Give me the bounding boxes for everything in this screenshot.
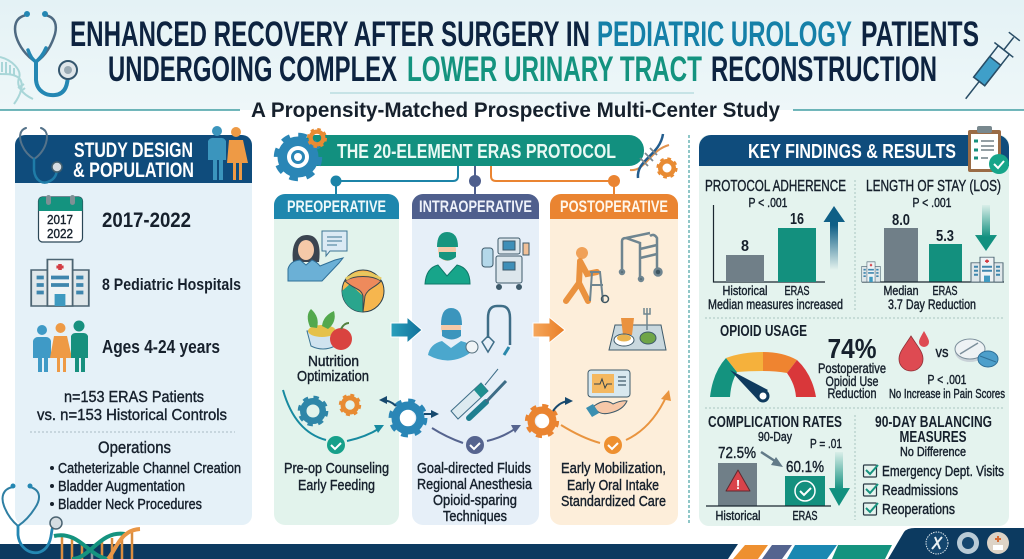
section: opioid usage: OPIOID USAGE: [720, 323, 807, 340]
chart: protocol adherence: 16: [790, 211, 804, 228]
panel title: & POPULATION: [73, 159, 194, 182]
icon: check badge: [795, 481, 815, 501]
icon: walker: [620, 233, 662, 281]
title: UNDERGOING COMPLEX: [108, 50, 397, 89]
hospital count: 8 Pediatric Hospitals: [102, 275, 241, 294]
icon: small hospital: [862, 262, 880, 282]
arrow: complication decrease: [829, 452, 850, 506]
chart: length of stay: P < .001: [912, 195, 952, 210]
process icons: [432, 425, 521, 454]
icon: bottom stethoscope: [3, 484, 62, 553]
chart: protocol adherence: 8: [741, 238, 749, 255]
column: postoperative: [550, 194, 678, 525]
icon: calendar: 2022: [47, 226, 73, 241]
section: opioid usage: Opioid Use: [826, 373, 879, 389]
arrow: intra to post: [533, 317, 565, 343]
column: preoperative: [274, 194, 399, 525]
opioid reduction: 74%: [828, 333, 877, 364]
elements: intraoperative: Opioid-sparing: [433, 493, 517, 509]
column: postoperative: POSTOPERATIVE: [560, 197, 668, 216]
process icons: [283, 390, 384, 454]
chart: complication rates: !: [736, 477, 740, 492]
chart: protocol adherence: ERAS: [784, 283, 810, 298]
icon: monitor and hand: [586, 370, 630, 417]
icon: pills: [955, 339, 998, 367]
arrow: historical to ERAS: [761, 452, 778, 463]
icon: anatomical diagram: [342, 270, 384, 312]
chart: length of stay: 5.3: [936, 228, 954, 245]
panel header: [15, 135, 252, 183]
icon: blood drops: [899, 331, 929, 371]
icon: calendar: 2017: [47, 212, 73, 227]
operations list: Operations: [98, 438, 171, 457]
logos: [926, 532, 1009, 554]
section: opioid usage: [710, 323, 1005, 401]
chart: length of stay: 8.0: [892, 212, 910, 229]
chart: complication rates: 72.5%: [718, 445, 756, 462]
chart: length of stay: Median: [884, 283, 918, 298]
date range: 2017-2022: [102, 209, 191, 232]
icon: two people: [208, 126, 248, 180]
icon: bottom DNA: [54, 529, 140, 559]
operations list: Bladder Augmentation: [58, 479, 185, 495]
header rules: [0, 93, 1024, 110]
chart: complication rates: Historical: [716, 509, 760, 523]
chart: complication rates: [706, 414, 850, 523]
chart: complication rates: 90-Day: [758, 429, 792, 444]
gauge: [710, 352, 816, 401]
icon: gear connector orange: [528, 397, 573, 436]
panel: ERAS protocol: [274, 130, 678, 525]
icon: checkboxes: [864, 465, 878, 515]
title: LOWER URINARY TRACT: [407, 50, 702, 89]
section: balancing measures: No Difference: [900, 445, 966, 459]
chart: protocol adherence: PROTOCOL ADHERENCE: [705, 178, 846, 195]
elements: postoperative: Standardized Care: [561, 494, 666, 510]
section: balancing measures: [864, 414, 1004, 518]
elements: preoperative: Early Feeding: [298, 478, 375, 494]
icon: syringe: [956, 29, 1024, 106]
title: ENHANCED RECOVERY AFTER SURGERY IN: [70, 15, 590, 54]
icon: anesthesia machine: [482, 238, 529, 290]
column: preoperative: PREOPERATIVE: [287, 197, 386, 216]
panel title: KEY FINDINGS & RESULTS: [748, 140, 956, 163]
chart: protocol adherence: P < .001: [748, 195, 788, 210]
icon: gear connector blue: [379, 396, 439, 434]
icon: calendar: [38, 195, 82, 242]
icon: hospital: [31, 260, 89, 306]
arrow: pre to intra: [391, 317, 422, 343]
elements: intraoperative: Goal-directed Fluids: [417, 461, 531, 477]
label: nutrition: [297, 354, 369, 385]
icon: header DNA: [0, 57, 33, 104]
header background: [0, 0, 1024, 110]
icon: warning: [726, 470, 750, 491]
icon: three patients: [33, 320, 88, 372]
section: opioid usage: vs: [936, 344, 948, 361]
arrow: decrease: [975, 205, 997, 251]
chart: protocol adherence: [705, 178, 846, 312]
chart: length of stay: [862, 178, 1004, 312]
chart: protocol adherence: Median measures increased: [708, 297, 843, 312]
protocol banner: THE 20-ELEMENT ERAS PROTOCOL: [337, 141, 616, 163]
sample size: vs. n=153 Historical Controls: [37, 407, 227, 424]
section: balancing measures: 90-DAY BALANCING: [875, 414, 992, 431]
operations list: Bladder Neck Procedures: [58, 497, 202, 513]
icon: gears: [278, 130, 326, 178]
chart: complication rates: 60.1%: [786, 459, 824, 476]
title: PATIENTS: [861, 15, 979, 54]
section: opioid usage: Reduction: [828, 385, 876, 401]
section: balancing measures: Reoperations: [882, 502, 955, 518]
panel: key findings: [699, 126, 1009, 526]
section: balancing measures: Readmissions: [882, 483, 958, 499]
icon: patient with walker: [566, 247, 608, 302]
label: nutrition: Optimization: [297, 369, 369, 385]
panel title: [73, 139, 194, 182]
icon: clipboard: [968, 126, 1009, 174]
sample size: [37, 389, 227, 424]
chart: complication rates: COMPLICATION RATES: [708, 414, 842, 431]
footer stripes: [733, 545, 892, 559]
operations list: Catheterizable Channel Creation: [58, 461, 241, 477]
process icons: [561, 390, 671, 454]
age range: Ages 4-24 years: [102, 337, 220, 357]
column: intraoperative: INTRAOPERATIVE: [419, 197, 532, 216]
chart: complication rates: ERAS: [792, 509, 818, 523]
column: intraoperative: [412, 194, 539, 525]
icon: stethoscope: [20, 128, 62, 183]
section: opioid usage: P < .001: [928, 372, 966, 387]
connectors: [330, 166, 620, 195]
panel title: STUDY DESIGN: [74, 139, 193, 162]
icon: counselor: [288, 231, 347, 281]
subtitle: A Propensity-Matched Prospective Multi-Center Study: [251, 99, 780, 122]
icon: anesthesiologist: [425, 232, 470, 284]
section: balancing measures: MEASURES: [900, 429, 966, 446]
operations list: [50, 438, 241, 513]
panel: study design and population: [15, 126, 252, 525]
label: nutrition: Nutrition: [308, 354, 359, 370]
sample size: n=153 ERAS Patients: [64, 389, 204, 406]
icon: nutrition: [307, 309, 352, 350]
elements: intraoperative: [417, 461, 533, 525]
chart: protocol adherence: Historical: [722, 283, 768, 298]
title: [70, 15, 979, 89]
chart: complication rates: P = .01: [810, 436, 842, 451]
icon: large hospital: [971, 257, 1003, 282]
panel header: [699, 135, 1009, 166]
elements: preoperative: Pre-op Counseling: [284, 461, 389, 477]
chart: length of stay: 3.7 Day Reduction: [888, 297, 976, 312]
elements: postoperative: Early Oral Intake: [567, 478, 659, 494]
footer band: [0, 528, 1024, 559]
elements: postoperative: [561, 461, 666, 510]
icon: provider with stethoscope: [428, 306, 510, 360]
chart: length of stay: ERAS: [932, 283, 958, 298]
arrow: increase: [824, 206, 845, 270]
section: opioid usage: Postoperative: [818, 360, 886, 376]
elements: intraoperative: Regional Anesthesia: [417, 477, 533, 493]
title: PEDIATRIC UROLOGY: [597, 15, 852, 54]
icon: header stethoscope: [15, 11, 77, 95]
icon: meal tray: [609, 308, 666, 350]
elements: postoperative: Early Mobilization,: [561, 461, 666, 477]
protocol banner: [300, 135, 644, 166]
elements: intraoperative: Techniques: [443, 509, 507, 525]
icon: dna and gear: [630, 134, 676, 178]
icon: syringe and tools: [451, 369, 506, 419]
elements: preoperative: [284, 461, 389, 494]
